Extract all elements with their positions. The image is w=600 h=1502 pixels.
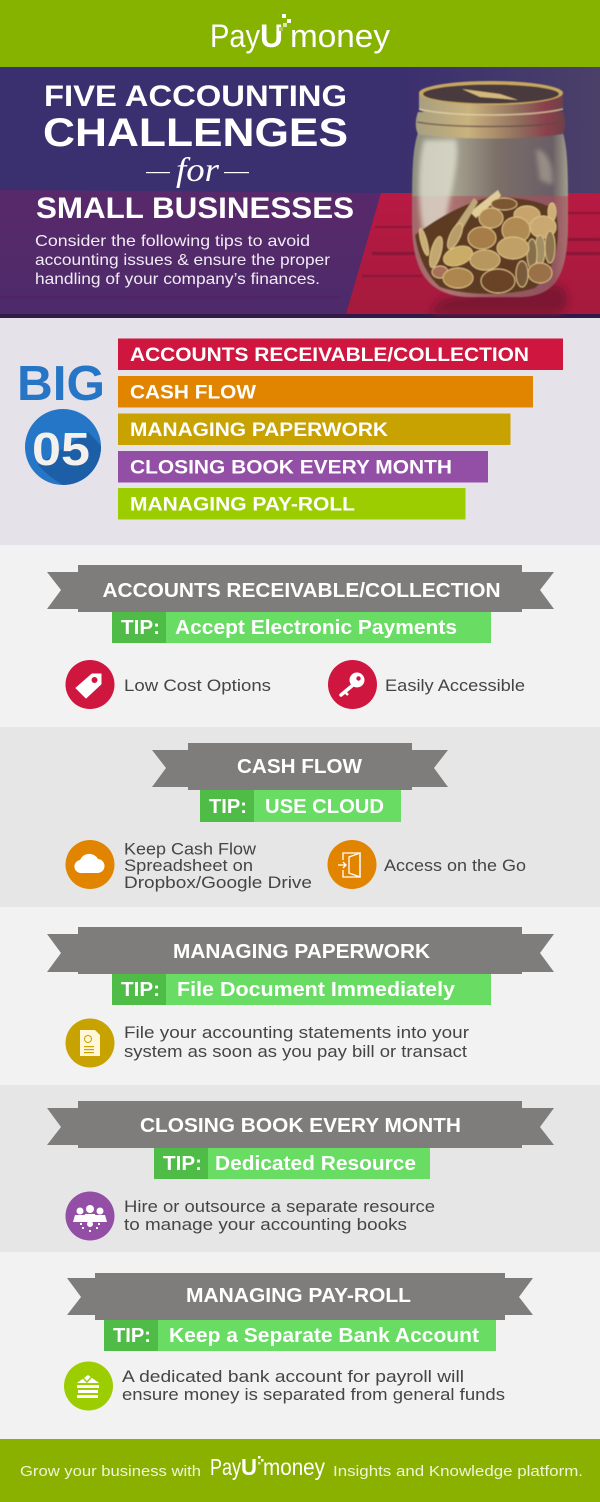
- footer text right: Insights and Knowledge platform.: [333, 1463, 583, 1480]
- ribbon heading: [47, 1101, 554, 1148]
- panel: managing pay-roll tip: [0, 1252, 600, 1439]
- text: keep cash flow spreadsheet: Spreadsheet on: [124, 857, 253, 875]
- hero table: [346, 193, 600, 314]
- ribbon heading: ACCOUNTS RECEIVABLE/COLLECTION: [102, 580, 500, 602]
- hero title: FIVE ACCOUNTING: [44, 80, 347, 113]
- text: file statements: [124, 1024, 470, 1061]
- footer logo: [210, 1454, 325, 1480]
- panel: accounts receivable tip: [0, 545, 600, 727]
- text: keep cash flow spreadsheet: Dropbox/Google Drive: [124, 874, 312, 892]
- hero banner: [0, 67, 600, 318]
- 05 badge: [25, 409, 101, 485]
- footer logo: Pay: [210, 1454, 241, 1480]
- text: keep cash flow spreadsheet: [124, 840, 312, 892]
- ribbon heading: MANAGING PAY-ROLL: [186, 1285, 411, 1307]
- bar: managing pay-roll: [118, 488, 466, 520]
- tip bar: [112, 612, 491, 643]
- text: hire or outsource: [124, 1198, 435, 1234]
- hero subtitle: [35, 233, 331, 288]
- text: hire or outsource: Hire or outsource a separate resource: [124, 1198, 435, 1216]
- hero subtitle: accounting issues & ensure the proper: [35, 252, 331, 269]
- text: hire or outsource: to manage your accounting books: [124, 1216, 407, 1234]
- bar: accounts receivable: [118, 338, 563, 370]
- bar: accounts receivable: ACCOUNTS RECEIVABLE/COLLECTION: [130, 344, 529, 366]
- hero subtitle: handling of your company’s finances.: [35, 271, 320, 288]
- ribbon heading: [152, 743, 448, 790]
- icon: people: [66, 1192, 114, 1240]
- bar: cash flow: CASH FLOW: [130, 382, 257, 404]
- header bar: [0, 0, 600, 67]
- text: keep cash flow spreadsheet: Keep Cash Flow: [124, 840, 256, 858]
- hero subtitle: Consider the following tips to avoid: [35, 233, 310, 250]
- icon: price tag: [66, 660, 114, 709]
- hero title: SMALL BUSINESSES: [36, 192, 354, 225]
- BIG heading: BIG: [17, 357, 105, 411]
- bar: cash flow: [118, 376, 533, 408]
- icon: document: [66, 1018, 114, 1068]
- footer text left: Grow your business with: [20, 1463, 201, 1480]
- tip bar: Accept Electronic Payments: [175, 617, 457, 639]
- panel: big 05 list: [0, 318, 600, 545]
- hero title: CHALLENGES: [43, 111, 348, 155]
- tip bar: TIP:: [209, 796, 247, 818]
- tip bar: [104, 1320, 496, 1351]
- ribbon heading: CLOSING BOOK EVERY MONTH: [140, 1115, 461, 1137]
- panel: managing paperwork tip: [0, 907, 600, 1085]
- tip bar: File Document Immediately: [177, 979, 456, 1001]
- bar: managing pay-roll: MANAGING PAY-ROLL: [130, 494, 355, 516]
- hero title: for: [176, 152, 220, 189]
- PayU money logo: Pay: [210, 18, 260, 54]
- tip bar: TIP:: [113, 1325, 151, 1347]
- jar with coins: [412, 81, 568, 314]
- text: dedicated bank account: [122, 1368, 505, 1404]
- tip bar: Keep a Separate Bank Account: [169, 1325, 479, 1347]
- bar: closing book: [118, 451, 488, 482]
- text: easily accessible: Easily Accessible: [385, 677, 525, 695]
- footer bar: [0, 1439, 600, 1502]
- icon: key: [328, 660, 377, 709]
- tip bar: USE CLOUD: [265, 796, 384, 818]
- ribbon heading: [47, 927, 554, 974]
- bar: managing paperwork: [118, 414, 510, 445]
- PayU money logo: money: [290, 18, 390, 54]
- text: access on the go: Access on the Go: [384, 857, 526, 875]
- tip bar: Dedicated Resource: [215, 1153, 416, 1175]
- footer logo: money: [263, 1454, 325, 1480]
- ribbon heading: MANAGING PAPERWORK: [173, 941, 431, 963]
- bar: closing book: CLOSING BOOK EVERY MONTH: [130, 456, 452, 478]
- tip bar: [200, 790, 401, 822]
- bar: managing paperwork: MANAGING PAPERWORK: [130, 419, 388, 441]
- icon: money stack: [64, 1362, 113, 1410]
- text: dedicated bank account: ensure money is separated from general funds: [122, 1386, 505, 1404]
- 05 badge: 05: [32, 423, 90, 475]
- text: low cost options: Low Cost Options: [124, 677, 271, 695]
- text: file statements: system as soon as you pay bill or transact: [124, 1043, 467, 1061]
- ribbon heading: [47, 565, 554, 612]
- PayU money logo: [210, 14, 390, 54]
- panel: closing book tip: [0, 1085, 600, 1252]
- ribbon heading: [67, 1273, 533, 1320]
- ribbon heading: CASH FLOW: [237, 756, 362, 778]
- icon: door: [328, 840, 376, 889]
- icon: cloud: [66, 840, 114, 889]
- text: file statements: File your accounting statements into your: [124, 1024, 470, 1042]
- tip bar: TIP:: [121, 617, 160, 639]
- footer logo: U: [241, 1454, 257, 1480]
- tip bar: [154, 1148, 430, 1179]
- tip bar: TIP:: [121, 979, 160, 1001]
- hero lower-left panel: [0, 190, 381, 314]
- tip bar: [112, 974, 491, 1005]
- panel: cash flow tip: [0, 727, 600, 907]
- PayU money logo: U: [260, 18, 283, 54]
- text: dedicated bank account: A dedicated bank account for payroll will: [122, 1368, 464, 1386]
- hero title: [36, 80, 354, 225]
- tip bar: TIP:: [163, 1153, 202, 1175]
